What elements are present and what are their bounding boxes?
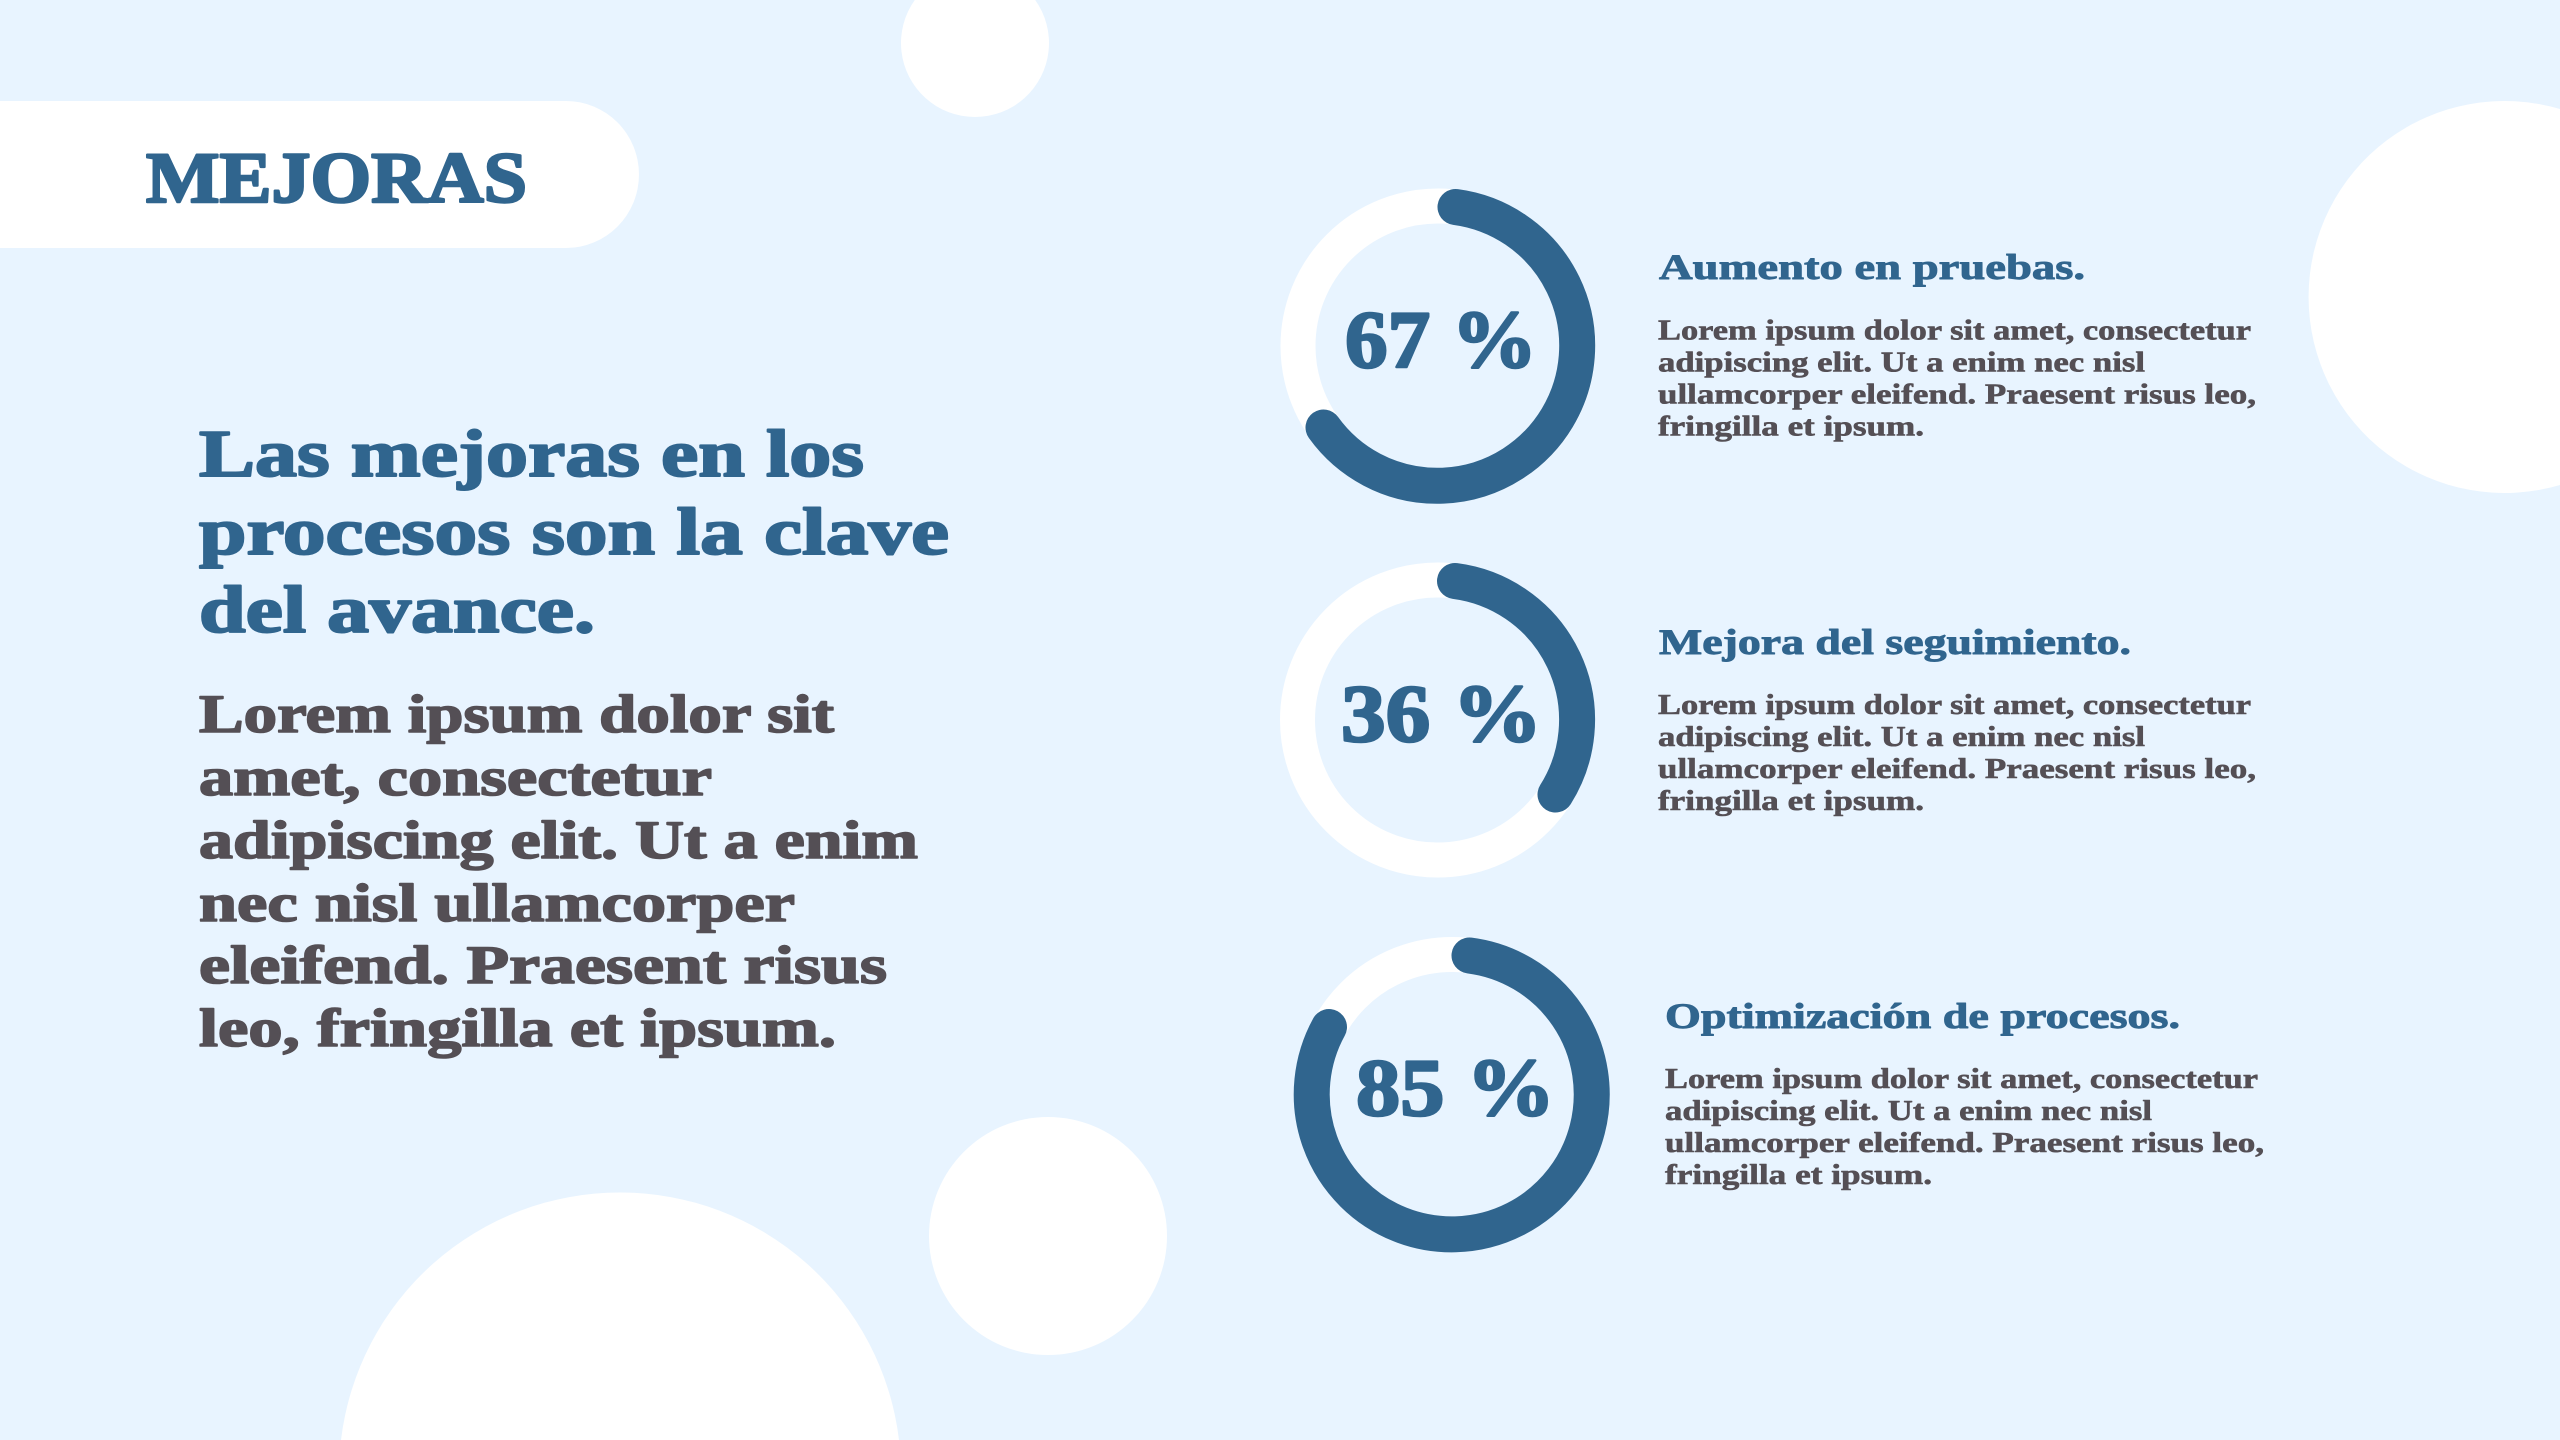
- donut chart: 36 %: [1298, 580, 1578, 860]
- item: Aumento en pruebas: [1658, 247, 2256, 442]
- donut chart: 85 %: [1312, 954, 1592, 1234]
- item: Aumento en pruebas: Aumento en pruebas.: [1659, 247, 2085, 287]
- item: Aumento en pruebas: ullamcorper eleifend. Praesent risus leo,: [1658, 380, 2256, 410]
- item: Optimización de procesos: fringilla et ipsum.: [1665, 1160, 1932, 1191]
- body text: eleifend. Praesent risus: [199, 935, 887, 995]
- item: Optimización de procesos: [1665, 996, 2264, 1191]
- item: Mejora del seguimiento: fringilla et ipsum.: [1658, 786, 1924, 817]
- item: Aumento en pruebas: adipiscing elit. Ut a enim nec nisl: [1658, 348, 2145, 378]
- item: Optimización de procesos: Optimización de procesos.: [1665, 996, 2180, 1036]
- body text: leo, fringilla et ipsum.: [199, 998, 836, 1058]
- title banner: [0, 101, 639, 248]
- item: Mejora del seguimiento: Mejora del seguimiento.: [1659, 622, 2131, 662]
- item: Mejora del seguimiento: ullamcorper eleifend. Praesent risus leo,: [1658, 754, 2256, 785]
- item: Optimización de procesos: adipiscing elit. Ut a enim nec nisl: [1665, 1096, 2152, 1127]
- decorative circle: right: [2309, 101, 2560, 493]
- item: Aumento en pruebas: fringilla et ipsum.: [1658, 412, 1924, 442]
- heading: [199, 417, 949, 647]
- heading: del avance.: [199, 573, 595, 647]
- donut chart: 67 %: [1298, 206, 1578, 486]
- decorative circle: top: [901, 0, 1049, 117]
- body text: [199, 684, 918, 1058]
- heading: procesos son la clave: [199, 495, 949, 569]
- donut chart: 85 %: 85 %: [1356, 1042, 1555, 1133]
- item: Optimización de procesos: ullamcorper eleifend. Praesent risus leo,: [1665, 1128, 2264, 1159]
- item: Mejora del seguimiento: Lorem ipsum dolor sit amet, consectetur: [1658, 690, 2251, 721]
- body text: nec nisl ullamcorper: [199, 873, 795, 933]
- decorative circle: bottom left large: [341, 1192, 899, 1440]
- title: MEJORAS: [146, 138, 527, 218]
- item: Mejora del seguimiento: [1658, 622, 2256, 817]
- donut chart: 67 %: 67 %: [1345, 294, 1537, 385]
- body text: amet, consectetur: [199, 747, 712, 807]
- heading: Las mejoras en los: [199, 417, 864, 491]
- donut chart: 36 %: 36 %: [1341, 668, 1542, 759]
- body text: Lorem ipsum dolor sit: [199, 684, 834, 744]
- item: Aumento en pruebas: Lorem ipsum dolor sit amet, consectetur: [1658, 316, 2251, 346]
- item: Mejora del seguimiento: adipiscing elit. Ut a enim nec nisl: [1658, 722, 2145, 753]
- item: Optimización de procesos: Lorem ipsum dolor sit amet, consectetur: [1665, 1064, 2258, 1095]
- decorative circle: bottom small: [929, 1117, 1167, 1355]
- body text: adipiscing elit. Ut a enim: [199, 810, 918, 870]
